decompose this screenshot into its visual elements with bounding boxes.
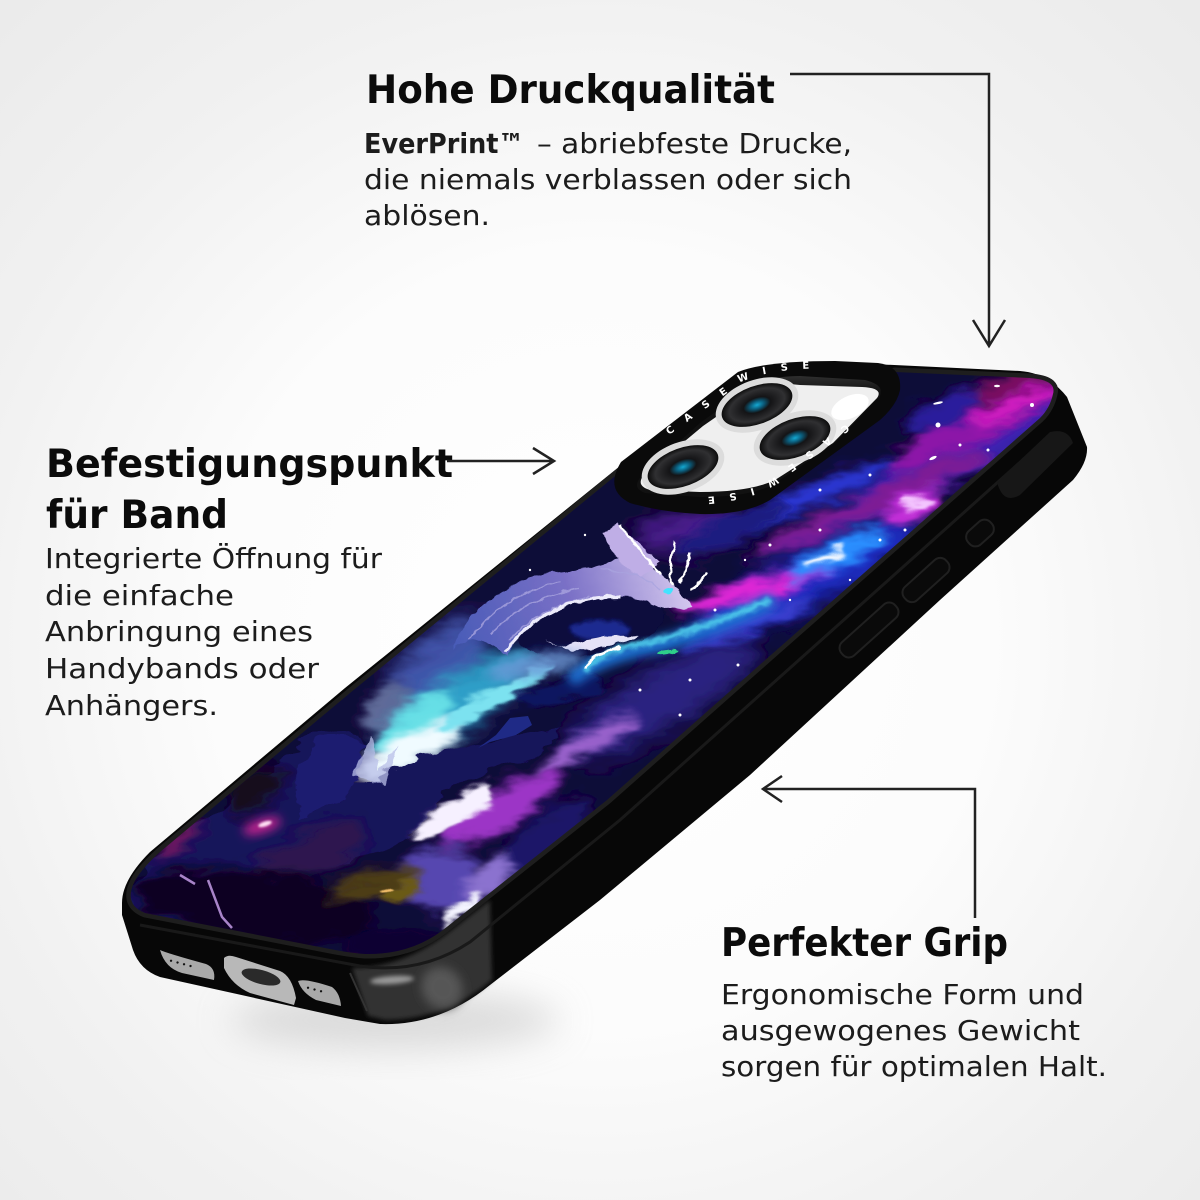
text: grip: sorgen für optimalen Halt. xyxy=(721,1051,1107,1083)
arrow: strap attachment xyxy=(447,448,554,474)
flash xyxy=(827,389,873,425)
side buttons xyxy=(836,516,997,661)
stars xyxy=(529,385,1034,716)
text: strap attachment: Anbringung eines xyxy=(45,616,313,648)
screen artwork xyxy=(130,372,1054,954)
phone shadow xyxy=(230,990,560,1050)
text: strap attachment: die einfache xyxy=(45,580,234,612)
text: print quality: – abriebfeste Drucke, xyxy=(537,128,852,160)
callout: grip xyxy=(721,921,1107,1083)
text: print quality: ablösen. xyxy=(364,200,490,232)
rim highlight xyxy=(131,372,1054,954)
inner mane edge xyxy=(505,597,620,652)
text: print quality: die niemals verblassen oder sich xyxy=(364,164,852,196)
rider silhouette xyxy=(478,716,532,748)
upper nebula xyxy=(622,376,1054,572)
action button xyxy=(963,516,997,550)
text: strap attachment xyxy=(45,541,383,722)
island ring xyxy=(614,361,900,514)
arrow: grip xyxy=(763,776,975,918)
text: grip: Ergonomische Form und xyxy=(721,979,1084,1011)
dragon eye xyxy=(663,588,673,594)
left speaker: •••• xyxy=(167,956,196,972)
dragon xyxy=(453,523,770,685)
left speaker xyxy=(160,950,214,980)
camera island xyxy=(614,361,900,514)
lower body xyxy=(486,645,584,685)
text: strap attachment: Integrierte Öffnung für xyxy=(45,541,383,575)
teal cloud xyxy=(351,603,606,792)
green spark xyxy=(657,648,678,654)
text: grip: ausgewogenes Gewicht xyxy=(721,1015,1080,1047)
text: grip xyxy=(721,979,1107,1083)
magenta and blue streak xyxy=(675,482,947,660)
lower nebula xyxy=(398,619,770,912)
power button xyxy=(836,599,902,661)
phone case xyxy=(122,361,1088,1024)
shard spikes xyxy=(352,735,398,785)
heading: strap attachment: Befestigungspunkt xyxy=(46,442,453,487)
text: strap attachment: Anhängers. xyxy=(45,690,218,722)
text: strap attachment: Handybands oder xyxy=(45,653,320,685)
callout: strap attachment xyxy=(45,442,453,722)
painted nebula xyxy=(130,372,1054,954)
camera plate xyxy=(641,384,879,492)
golden glow xyxy=(322,862,424,909)
heading: strap attachment: für Band xyxy=(46,493,228,538)
right speaker: ••• xyxy=(304,983,326,997)
ring lettering bottom: CASEWISE xyxy=(708,426,848,504)
stream glow xyxy=(570,600,775,680)
ring inner bevel xyxy=(637,376,881,497)
dragon crest xyxy=(620,525,706,590)
foreground twig xyxy=(180,875,232,928)
white cloud xyxy=(408,780,492,840)
ring lettering top: CASEWISE xyxy=(666,362,809,434)
heading: grip: Perfekter Grip xyxy=(721,921,1008,966)
right speaker xyxy=(298,980,341,1006)
dragon belly xyxy=(545,635,640,650)
fur strands xyxy=(470,570,660,640)
dark rocks xyxy=(120,728,560,960)
pink glow xyxy=(241,813,283,839)
case body xyxy=(122,362,1087,1024)
heading: print quality: Hohe Druckqualität xyxy=(366,68,775,113)
arrow: print quality xyxy=(790,74,1005,346)
hollow glow xyxy=(570,620,630,640)
dragon body xyxy=(453,560,693,657)
text: print quality xyxy=(364,128,852,232)
text: print quality: EverPrint™ xyxy=(364,128,524,160)
volume button xyxy=(899,555,953,605)
strap loop xyxy=(997,431,1073,498)
charging port xyxy=(224,956,296,1005)
lens left xyxy=(634,429,732,505)
dragon hollow xyxy=(518,600,664,656)
dragon wing xyxy=(603,523,660,577)
lens right xyxy=(746,400,844,476)
light under rim xyxy=(441,890,483,926)
light stream xyxy=(585,600,770,672)
heading: strap attachment xyxy=(46,442,453,538)
corner highlight xyxy=(350,900,492,1020)
rim groove xyxy=(140,440,1045,968)
lens top xyxy=(708,367,806,443)
artwork base xyxy=(133,372,1030,954)
callout: print quality xyxy=(364,68,852,232)
